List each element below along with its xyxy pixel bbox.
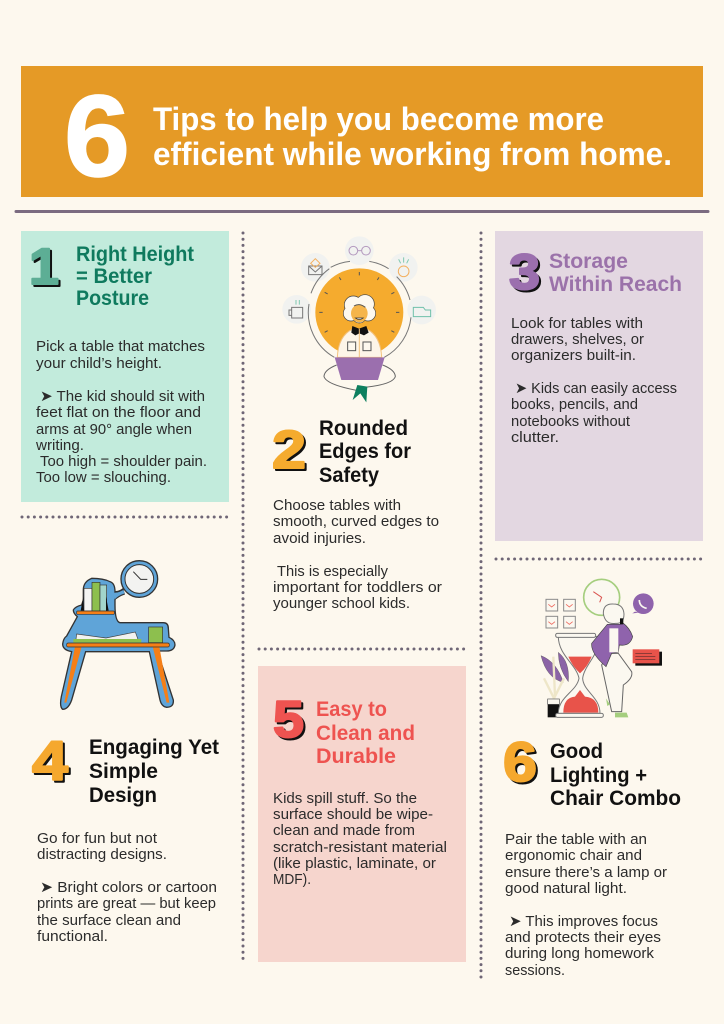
- body text: tip 4: distracting designs.: [37, 846, 167, 863]
- heading: tip 2: Edges for: [319, 439, 412, 463]
- number 6: 6: [505, 732, 539, 795]
- number 2: 2: [272, 420, 306, 480]
- heading: tip 1: Right Height: [76, 242, 194, 266]
- body text: tip 3: books, pencils, and: [511, 396, 638, 413]
- panel: tip 5: [258, 666, 466, 962]
- heading: tip 4: [89, 735, 219, 807]
- body text: tip 4: prints are great — but keep: [37, 895, 216, 912]
- heading: tip 1: [76, 242, 194, 310]
- number 4: 4: [34, 731, 70, 794]
- body text: tip 3: Look for tables with: [511, 315, 643, 332]
- number 5: 5: [275, 693, 306, 751]
- heading: tip 4: Design: [89, 783, 157, 807]
- number 5: 5: [273, 691, 304, 749]
- heading: tip 6: Lighting +: [550, 763, 647, 787]
- body text: tip 2: [273, 497, 442, 612]
- body text: tip 5: [273, 790, 447, 888]
- heading: tip 5: Easy to: [316, 697, 387, 721]
- body text: tip 4: the surface clean and: [37, 912, 181, 929]
- body text: tip 3: drawers, shelves, or: [511, 331, 644, 348]
- title: [153, 101, 672, 172]
- body text: tip 6: and protects their eyes: [505, 929, 661, 946]
- body text: tip 4: [37, 830, 217, 945]
- body text: tip 5: Kids spill stuff. So the: [273, 790, 417, 807]
- body text: tip 3: [511, 315, 677, 446]
- illustration: person with hourglass and clock: [541, 579, 662, 717]
- body text: tip 1: [35, 338, 207, 486]
- panel: tip 1: [21, 231, 229, 502]
- body text: tip 4: Go for fun but not: [37, 830, 158, 847]
- heading: tip 2: Rounded: [319, 416, 408, 440]
- heading: tip 6: Chair Combo: [550, 786, 681, 810]
- number 2: 2: [274, 422, 308, 482]
- body text: tip 2: This is especially: [277, 563, 388, 580]
- body text: tip 2: smooth, curved edges to: [273, 513, 439, 530]
- body text: tip 1: Too high = shoulder pain.: [40, 453, 207, 470]
- title: efficient while working from home.: [153, 136, 672, 172]
- body text: tip 6: ➤ This improves focus: [509, 913, 658, 930]
- heading: tip 2: [319, 416, 412, 487]
- body text: tip 5: surface should be wipe-: [273, 806, 433, 823]
- body text: tip 6: ensure there’s a lamp or: [505, 864, 667, 881]
- body text: tip 2: younger school kids.: [273, 595, 410, 612]
- body text: tip 3: ➤ Kids can easily access: [515, 380, 677, 397]
- icons in bubbles: [289, 246, 431, 318]
- body text: tip 4: functional.: [37, 928, 108, 945]
- body text: tip 1: writing.: [35, 437, 84, 454]
- body text: tip 1: Pick a table that matches: [36, 338, 205, 355]
- heading: tip 2: Safety: [319, 463, 379, 487]
- body text: tip 5: MDF).: [273, 871, 311, 888]
- body text: tip 5: clean and made from: [273, 822, 415, 839]
- number 3: 3: [509, 244, 540, 300]
- body text: tip 1: ➤ The kid should sit with: [40, 388, 205, 405]
- heading: tip 3: Storage: [549, 249, 628, 273]
- title: Tips to help you become more: [153, 101, 604, 137]
- body text: tip 6: during long homework: [505, 945, 654, 962]
- body text: tip 2: important for toddlers or: [273, 579, 442, 596]
- illustration: person with laptop: [282, 236, 436, 402]
- number 4: 4: [32, 729, 68, 792]
- number 6: 6: [503, 730, 537, 793]
- heading: tip 1: Posture: [76, 286, 149, 310]
- body text: tip 2: Choose tables with: [273, 497, 401, 514]
- body text: tip 5: scratch-resistant material: [273, 839, 447, 856]
- body text: tip 6: sessions.: [505, 962, 565, 979]
- header banner: [21, 66, 703, 201]
- heading: tip 5: [316, 697, 415, 768]
- body text: tip 1: arms at 90° angle when: [36, 421, 192, 438]
- body text: tip 6: good natural light.: [505, 880, 627, 897]
- number 1: 1: [31, 240, 61, 297]
- body text: tip 1: your child’s height.: [36, 355, 162, 372]
- body text: tip 3: notebooks without: [511, 413, 631, 430]
- number 3: 3: [511, 246, 542, 302]
- big number 6: 6: [64, 71, 130, 201]
- heading: tip 5: Clean and: [316, 721, 415, 745]
- heading: tip 1: = Better: [76, 264, 153, 288]
- body text: tip 2: avoid injuries.: [273, 530, 366, 547]
- body text: tip 6: ergonomic chair and: [505, 847, 642, 864]
- heading: tip 4: Simple: [89, 759, 158, 783]
- body text: tip 5: (like plastic, laminate, or: [273, 855, 436, 872]
- heading: tip 6: [550, 739, 681, 810]
- illustration: desk with books and clock: [61, 561, 175, 709]
- heading: tip 4: Engaging Yet: [89, 735, 219, 759]
- number 1: 1: [29, 238, 59, 295]
- body text: tip 4: ➤ Bright colors or cartoon: [40, 879, 217, 896]
- body text: tip 1: Too low = slouching.: [36, 469, 171, 486]
- heading: tip 3: Within Reach: [549, 272, 682, 296]
- body text: tip 3: clutter.: [511, 429, 559, 446]
- body text: tip 6: Pair the table with an: [505, 831, 647, 848]
- body text: tip 3: organizers built-in.: [511, 347, 636, 364]
- heading: tip 3: [549, 249, 682, 296]
- heading: tip 6: Good: [550, 739, 603, 763]
- body text: tip 6: [505, 831, 667, 979]
- panel: tip 3: [495, 231, 703, 541]
- body text: tip 1: feet flat on the floor and: [36, 404, 201, 421]
- heading: tip 5: Durable: [316, 744, 396, 768]
